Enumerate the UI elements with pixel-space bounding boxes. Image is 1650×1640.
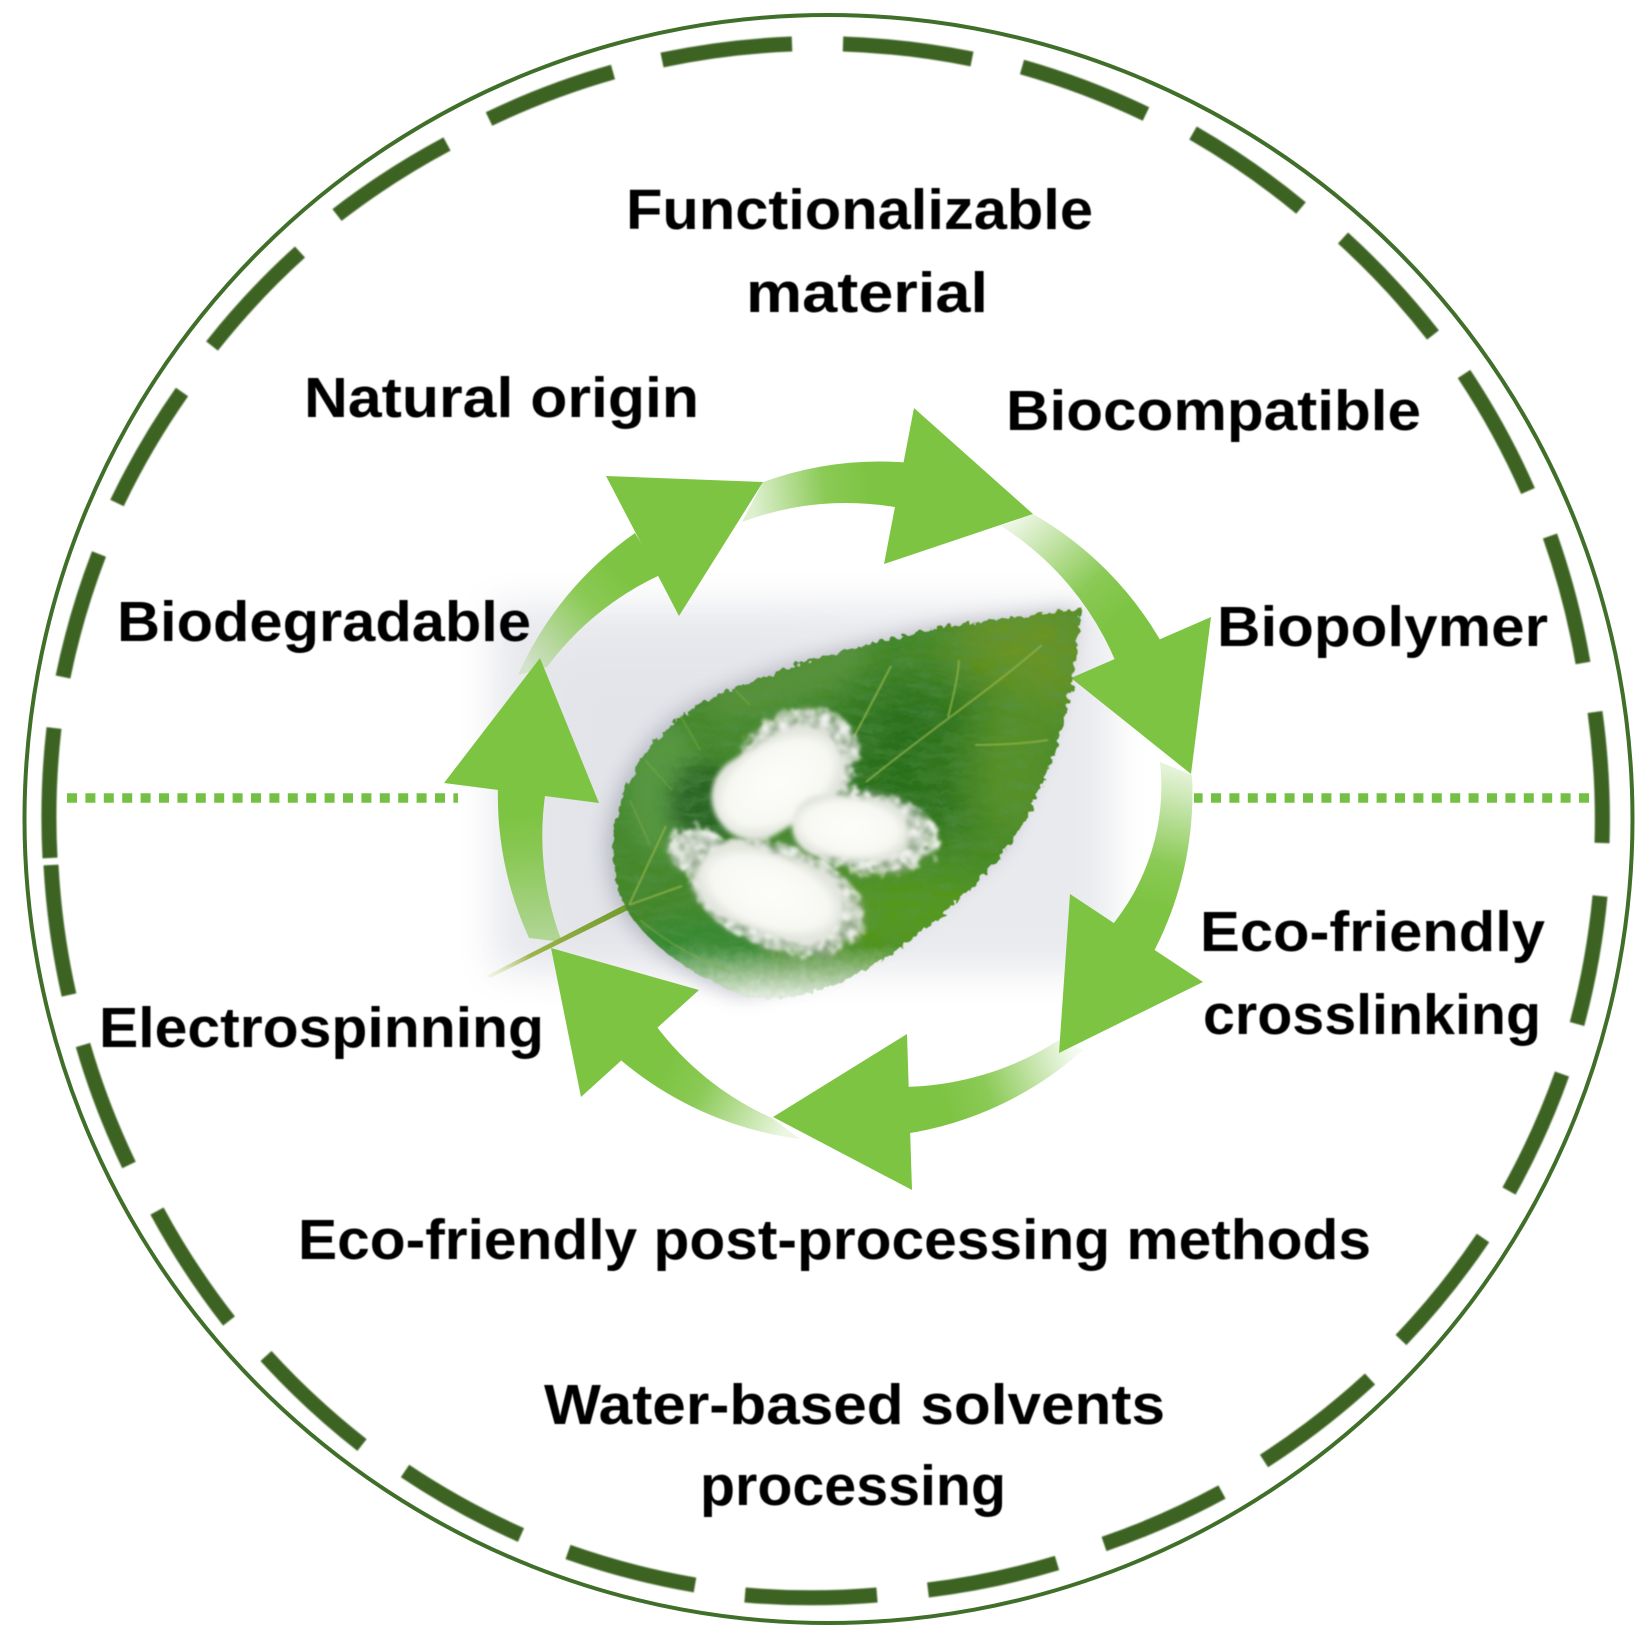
label: Electrospinning: Electrospinning: [99, 996, 544, 1060]
leaf blade: [611, 606, 1083, 1000]
arrow to biopolymer: [1001, 514, 1211, 774]
arrow to crosslinking: [1059, 762, 1203, 1053]
label: Eco-friendly post-processing methods: Eco-friendly post-processing methods: [298, 1208, 1371, 1272]
label: Eco-friendly: Eco-friendly: [1200, 900, 1545, 964]
silk underlay: [669, 690, 938, 974]
leaf with silk cocoons: [486, 585, 1105, 1010]
label: crosslinking: crosslinking: [1203, 983, 1541, 1047]
cocoons: [686, 710, 911, 955]
label: Natural origin: Natural origin: [304, 366, 699, 430]
leaf shadow: [607, 608, 1076, 995]
leaf veins: [629, 645, 1048, 972]
label: Functionalizable: Functionalizable: [626, 178, 1093, 242]
left dotted divider: [67, 793, 458, 803]
label: Biodegradable: Biodegradable: [117, 590, 531, 654]
arrow to electrospinning: [551, 948, 800, 1139]
label: material: material: [746, 261, 988, 325]
arrow to biocompatible: [742, 408, 1033, 564]
silk fibres: [667, 686, 942, 976]
arrow to biodegradable: [444, 658, 599, 942]
label: Biopolymer: Biopolymer: [1217, 595, 1548, 659]
petiole: [486, 902, 632, 978]
arrow to natural origin: [518, 476, 763, 675]
ring of green arrows: [444, 408, 1211, 1190]
label: processing: processing: [700, 1454, 1006, 1518]
label: Biocompatible: Biocompatible: [1006, 379, 1421, 443]
grey photo backdrop: [492, 604, 1112, 972]
right dotted divider: [1194, 793, 1589, 803]
label: Water-based solvents: Water-based solvents: [544, 1373, 1165, 1437]
labels: [99, 178, 1548, 1518]
arrow to post-processing: [773, 1034, 1083, 1190]
